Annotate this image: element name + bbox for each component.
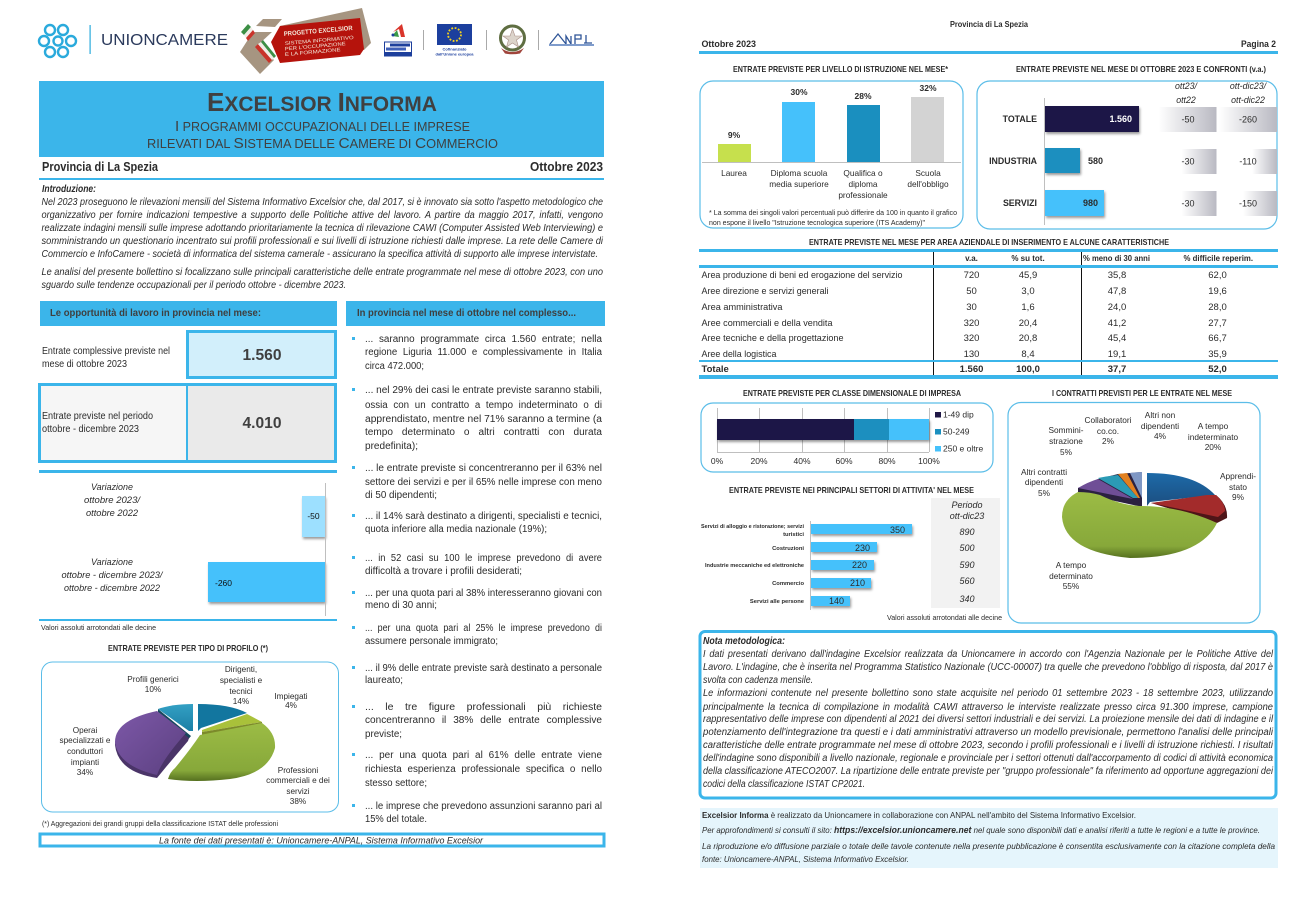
heading: opportunità: Le opportunità di lavoro in provincia nel mese:	[50, 307, 261, 319]
pie: profili	[115, 704, 275, 781]
table: area aziendale: Aree della logistica	[702, 349, 777, 360]
table: area aziendale: 20,4	[1019, 318, 1037, 329]
bullet list: ... le imprese che prevedono assunzioni saranno pari al	[365, 801, 602, 812]
heading: opportunità	[40, 301, 337, 326]
table: area aziendale: 24,0	[1108, 302, 1126, 313]
table: area aziendale: % meno di 30 anni	[1083, 254, 1150, 263]
bullet list: settore dei servizi e per il 65% nelle imprese con meno	[365, 477, 603, 488]
panel: colophon: La riproduzione e/o diffusione parziale o totale delle tavole contenute nella presente pubblicazione è consentita esclusivamente con la citazione completa della	[702, 842, 1275, 851]
bullet list: ... per una quota pari al 38% interesseranno giovani con	[365, 588, 602, 599]
table: area aziendale: % difficile reperim.	[1184, 254, 1253, 263]
table: area aziendale: Aree commerciali e della vendita	[702, 318, 833, 329]
bullet list: ... saranno programmate circa 1.560 entrate; nella	[365, 334, 603, 345]
chart: contratti: A tempo	[1198, 421, 1229, 431]
chart: entrate e confronti: ott22	[1176, 95, 1196, 105]
chart: livello di istruzione: Scuola	[915, 168, 941, 178]
panel: opportunità di lavoro	[40, 301, 337, 462]
chart: contratti: 9%	[1232, 492, 1245, 502]
chart: livello di istruzione: 32%	[919, 83, 937, 93]
text block: introduzione: Commercio e InfoCamere - società di informatica del sistema camerale - assicurano la specifica attività di supporto alle imprese intervistate.	[42, 249, 598, 260]
chart: settori di attività: 210	[850, 578, 865, 588]
chart: livello di istruzione: professionale	[838, 190, 888, 200]
chart: settori di attività: 230	[855, 543, 870, 553]
table: area aziendale: 50	[966, 286, 977, 297]
source box: La fonte dei dati presentati è: Unioncamere-ANPAL, Sistema Informativo Excelsior	[159, 836, 484, 846]
chart: entrate e confronti: -50	[1181, 114, 1195, 124]
bullet list: ... in 52 casi su 100 le imprese prevedono di avere	[365, 553, 603, 564]
bullet list: ... il 9% delle entrate previste sarà destinato a personale	[365, 663, 603, 674]
chart: settori di attività: 560	[959, 576, 975, 586]
table: area aziendale: 41,2	[1108, 318, 1126, 329]
chart: entrate e confronti: INDUSTRIA	[989, 156, 1038, 166]
chart: livello di istruzione: diploma	[848, 179, 878, 189]
chart: settori di attività: 140	[829, 596, 844, 606]
bullet list: laureato;	[365, 675, 403, 686]
pie: contratti	[1062, 472, 1227, 558]
bullet list: regione Liguria 11.000 e complessivamente in Italia	[365, 347, 603, 358]
chart: contratti: Apprendi-	[1220, 471, 1256, 481]
chart: classe dimensionale	[701, 388, 993, 472]
title: EXCELSIOR INFORMA	[207, 87, 437, 117]
table: area aziendale: 37,7	[1108, 364, 1126, 375]
logo: Progetto Excelsior: PER L'OCCUPAZIONE	[285, 41, 347, 52]
chart: contratti: I CONTRATTI PREVISTI PER LE ENTRATE NEL MESE	[1052, 388, 1232, 398]
chart: entrate per tipo di profilo: specializzati e	[60, 736, 111, 745]
chart: contratti: indeterminato	[1188, 432, 1239, 442]
table: area aziendale: 35,8	[1108, 270, 1126, 281]
stat: entrate del mese: mese di ottobre 2023	[42, 359, 127, 370]
table: area aziendale: Aree tecniche e della progettazione	[702, 333, 844, 344]
chart: entrate e confronti: -30	[1181, 198, 1195, 208]
bullet list: difficoltà a trovare i profili desiderati;	[365, 566, 522, 577]
province and date row: Ottobre 2023	[530, 159, 603, 174]
chart: settori di attività: turistici	[783, 532, 804, 538]
table: area aziendale: ENTRATE PREVISTE NEL MESE PER AREA AZIENDALE DI INSERIMENTO E ALCUNE CARATTERISTICHE	[809, 237, 1169, 247]
table: area aziendale: 52,0	[1208, 364, 1227, 375]
table: area aziendale: v.a.	[965, 254, 978, 263]
chart: variazioni: -260	[215, 578, 232, 588]
panel: colophon: Excelsior Informa è realizzato da Unioncamere in collaborazione con ANPAL nell'ambito del Sistema Informativo Excelsior.	[702, 811, 1136, 820]
chart: contratti: determinato	[1049, 571, 1093, 581]
heading: in provincia	[346, 301, 605, 326]
chart: classe dimensionale: 60%	[835, 456, 853, 466]
table: area aziendale: 30	[966, 302, 977, 313]
table: area aziendale: 19,1	[1108, 349, 1126, 360]
chart: entrate per tipo di profilo: conduttori	[67, 747, 103, 756]
chart: contratti: 20%	[1205, 442, 1222, 452]
chart: settori di attività: Valori assoluti arrotondati alle decine	[887, 613, 1002, 622]
stat: entrate del trimestre: Entrate previste nel periodo	[42, 411, 153, 422]
table: area aziendale: 19,6	[1208, 286, 1227, 297]
page 2 header: Pagina 2	[1241, 39, 1276, 50]
logo: Unioncamere	[39, 25, 228, 57]
bullet list: ... per una quota pari al 61% delle entrate viene	[365, 750, 603, 761]
chart: contratti: 55%	[1063, 581, 1080, 591]
chart: livello di istruzione: * La somma dei singoli valori percentuali può differire da 100 in quanto il grafico	[709, 208, 957, 217]
logo: Progetto Excelsior: E LA FORMAZIONE	[285, 47, 342, 58]
chart: entrate per tipo di profilo: specialisti e	[220, 676, 263, 685]
chart: entrate per tipo di profilo: Dirigenti,	[225, 665, 257, 674]
bullet list: richiesta esperienza professionale specifica o nello	[365, 764, 603, 775]
text block: introduzione: realizzate indagini mensili sulle imprese adottando prioritariamente la tecnica di rilevazione CAWI (Computer Assisted Web Interviewing) e	[42, 223, 603, 234]
bullet list: ... il 14% sarà destinato a dirigenti, specialisti e tecnici,	[365, 511, 602, 522]
chart: entrate e confronti: -150	[1239, 198, 1257, 208]
chart: settori di attività: Servizi alle persone	[750, 599, 805, 605]
chart: settori di attività: ott-dic23	[950, 511, 984, 521]
chart: entrate e confronti: -260	[1239, 114, 1257, 124]
province and date row	[39, 159, 604, 180]
chart: settori di attività: Industrie meccaniche ed elettroniche	[705, 563, 805, 569]
chart: livello di istruzione: Diploma scuola	[771, 168, 828, 178]
bullet list: ... per una quota pari al 25% le imprese prevedono di	[365, 623, 602, 634]
chart: contratti: dipendenti	[1025, 477, 1063, 487]
province and date row: Provincia di La Spezia	[42, 159, 159, 174]
table: area aziendale: 66,7	[1208, 333, 1227, 344]
bullet list: di 50 dipendenti;	[365, 490, 437, 501]
chart: entrate per tipo di profilo: Professioni	[278, 766, 318, 775]
chart: livello di istruzione: ENTRATE PREVISTE PER LIVELLO DI ISTRUZIONE NEL MESE*	[733, 64, 949, 74]
page 2 header	[699, 20, 1278, 54]
chart: entrate per tipo di profilo: 14%	[233, 697, 249, 706]
logo: partner institutions	[384, 24, 594, 56]
chart: variazioni: Variazione	[91, 557, 133, 568]
panel: nota metodologica: Nota metodologica:	[703, 636, 785, 647]
chart: classe dimensionale: 100%	[918, 456, 940, 466]
panel: nota metodologica: potenziamento dell'integrazione tra questi e i dati amministrativi attraverso un modello previsionale, permettono l'analisi delle principali	[702, 727, 1274, 738]
chart: settori di attività: 340	[959, 594, 975, 604]
chart: contratti: stato	[1229, 482, 1247, 492]
table: area aziendale: Area produzione di beni ed erogazione del servizio	[702, 270, 902, 281]
chart: entrate e confronti	[977, 64, 1277, 229]
panel: nota metodologica: caratteristiche delle entrate programmate nel mese di ottobre 2023, secondo i profili professionali e i livelli di istruzione richiesti. I risultati	[703, 740, 1274, 751]
chart: contratti: 5%	[1038, 488, 1051, 498]
stat: entrate del mese: 1.560	[242, 347, 282, 364]
page 2 header: Ottobre 2023	[702, 39, 756, 50]
chart: settori di attività: Commercio	[772, 581, 804, 587]
text block: introduzione: somministrando un questionario incentrato sui profili professionali e sui livelli di istruzione richiesti dalle imprese. La rete delle Camere di	[42, 236, 604, 247]
chart: entrate per tipo di profilo: servizi	[286, 787, 310, 796]
chart: entrate per tipo di profilo	[42, 643, 338, 828]
chart: entrate e confronti: ott-dic23/	[1230, 81, 1268, 91]
chart: entrate e confronti: TOTALE	[1003, 114, 1037, 124]
logo: Progetto Excelsior: SISTEMA INFORMATIVO	[285, 35, 354, 47]
chart: entrate per tipo di profilo: ENTRATE PREVISTE PER TIPO DI PROFILO (*)	[108, 643, 268, 653]
chart: classe dimensionale: 0%	[711, 456, 724, 466]
chart: livello di istruzione: 30%	[790, 87, 808, 97]
panel: in provincia nel mese	[346, 301, 605, 825]
chart: livello di istruzione: Laurea	[721, 168, 747, 178]
chart: livello di istruzione	[700, 64, 963, 228]
bullet list: tempo determinato o altri contratti con durata	[365, 427, 603, 438]
text block: introduzione: Introduzione:	[42, 184, 96, 195]
text block: introduzione: Le analisi del presente bollettino si focalizzano sulle principali caratteristiche delle entrate programmate nel mese di ottobre 2023, con uno	[42, 267, 603, 278]
chart: entrate per tipo di profilo: Profili generici	[127, 675, 179, 684]
stat: entrate del trimestre: 4.010	[242, 415, 282, 432]
chart: settori di attività: Servizi di alloggio e ristorazione; servizi	[701, 524, 804, 530]
chart: contratti: co.co.	[1097, 426, 1119, 436]
chart: contratti: Altri contratti	[1021, 467, 1067, 477]
header banner	[39, 81, 604, 157]
panel: colophon: Per approfondimenti si consulti il sito: https://excelsior.unioncamere.net nel quale sono disponibili dati e analisi riferiti a tutte le regioni e a tutte le province.	[702, 825, 1260, 835]
chart: entrate per tipo di profilo: commerciali e dei	[266, 776, 330, 785]
text block: introduzione: organizzativo per fornire indicazioni tempestive a supporto delle Politiche attive del lavoro. A partire da maggio 2017, infatti, vengono	[42, 210, 603, 221]
logo: Unioncamere: UNIONCAMERE	[101, 32, 228, 49]
chart: contratti: A tempo	[1056, 560, 1087, 570]
chart: variazioni: ottobre - dicembre 2023/	[62, 570, 164, 581]
chart: settori di attività: Costruzioni	[772, 546, 804, 552]
table: area aziendale: 45,4	[1108, 333, 1126, 344]
chart: classe dimensionale: 50-249	[943, 426, 970, 436]
chart: classe dimensionale: ENTRATE PREVISTE PER CLASSE DIMENSIONALE DI IMPRESA	[743, 388, 961, 398]
chart: entrate per tipo di profilo: 10%	[145, 685, 161, 694]
panel: nota metodologica: svolta con cadenza mensile.	[703, 675, 813, 686]
page 2 header: Provincia di La Spezia	[950, 20, 1028, 29]
chart: entrate per tipo di profilo: 34%	[77, 768, 93, 777]
chart: settori di attività: ENTRATE PREVISTE NEI PRINCIPALI SETTORI DI ATTIVITA' NEL MESE	[729, 485, 974, 495]
chart: classe dimensionale: 80%	[878, 456, 896, 466]
chart: classe dimensionale: 250 e oltre	[943, 444, 983, 454]
table: area aziendale: 35,9	[1208, 349, 1227, 360]
table: area aziendale: 28,0	[1208, 302, 1227, 313]
chart: variazioni: -50	[307, 511, 320, 521]
bullet list: quota inferiore alla media nazionale (19%);	[365, 524, 547, 535]
stat: entrate del mese	[42, 332, 336, 378]
chart: entrate per tipo di profilo: Operai	[73, 726, 97, 735]
chart: settori di attività: 590	[959, 560, 975, 570]
table: area aziendale: % su tot.	[1011, 254, 1045, 263]
chart: livello di istruzione: non espone il livello "Istruzione tecnologica superiore (ITS Academy)"	[709, 218, 925, 227]
chart: contratti: 4%	[1154, 431, 1167, 441]
chart: settori di attività: 350	[890, 525, 905, 535]
chart: livello di istruzione: media superiore	[769, 179, 829, 189]
chart: livello di istruzione: dell'obbligo	[907, 179, 949, 189]
chart: entrate e confronti: ott23/	[1175, 81, 1199, 91]
chart: settori di attività: 500	[959, 543, 975, 553]
chart: entrate e confronti: 580	[1088, 156, 1103, 166]
bullet list: 15% del totale.	[365, 814, 427, 825]
chart: entrate e confronti: -110	[1239, 156, 1257, 166]
chart: entrate e confronti: ott-dic22	[1231, 95, 1265, 105]
table: area aziendale: 320	[964, 333, 979, 344]
chart: settori di attività: 220	[852, 560, 867, 570]
logo: partner institutions: Cofinanziato	[442, 46, 467, 52]
subtitle line 2: RILEVATI DAL SISTEMA DELLE CAMERE DI COMMERCIO	[147, 135, 498, 152]
table: area aziendale: 8,4	[1021, 349, 1035, 360]
table: area aziendale: 100,0	[1016, 364, 1040, 375]
table: area aziendale: 1.560	[960, 364, 983, 375]
chart: entrate per tipo di profilo: Impiegati	[274, 692, 308, 701]
table: area aziendale: 1,6	[1021, 302, 1035, 313]
bullet list: ... le entrate previste si concentreranno per il 63% nel	[365, 463, 602, 474]
table: area aziendale: 62,0	[1208, 270, 1227, 281]
stat: entrate del trimestre: ottobre - dicembre 2023	[42, 424, 139, 435]
chart: entrate per tipo di profilo: impianti	[71, 758, 99, 767]
chart: settori di attività: Periodo	[951, 500, 983, 510]
source box	[40, 834, 604, 846]
stat: entrate del trimestre	[40, 384, 336, 462]
chart: entrate e confronti: ENTRATE PREVISTE NEL MESE DI OTTOBRE 2023 E CONFRONTI (v.a.)	[1016, 64, 1266, 74]
chart: contratti: dipendenti	[1141, 421, 1179, 431]
table: area aziendale: Totale	[702, 364, 729, 375]
bullet list: ... le tre figure professionali più richieste	[365, 702, 603, 713]
table: area aziendale: 27,7	[1208, 318, 1227, 329]
logo: Progetto Excelsior	[240, 8, 371, 74]
table: area aziendale: Aree direzione e servizi generali	[702, 286, 828, 297]
panel: nota metodologica	[700, 632, 1276, 798]
chart: entrate e confronti: 980	[1083, 198, 1098, 208]
bullet list: ossia con un contratto a tempo indeterminato o di	[365, 400, 602, 411]
chart: livello di istruzione: Qualifica o	[843, 168, 883, 178]
subtitle line 1: I PROGRAMMI OCCUPAZIONALI DELLE IMPRESE	[175, 118, 470, 135]
heading: in provincia: In provincia nel mese di ottobre nel complesso...	[357, 307, 576, 319]
bullet list: assumere personale immigrato;	[365, 636, 498, 647]
table: area aziendale	[699, 237, 1278, 379]
bullet list: stesso settore;	[365, 778, 427, 789]
chart: variazioni: ottobre - dicembre 2022	[64, 583, 161, 594]
chart: classe dimensionale: 1-49 dip	[943, 410, 974, 420]
chart: contratti: strazione	[1049, 436, 1083, 446]
text block: introduzione: sguardo sulle tendenze occupazionali per il periodo ottobre - dicembre 2023.	[42, 280, 346, 291]
panel: colophon: fonte: Unioncamere-ANPAL, Sistema Informativo Excelsior.	[702, 855, 909, 864]
chart: contratti	[1008, 388, 1260, 623]
bullet list: apprendistato, mentre nel 71% saranno a termine (a	[365, 414, 603, 425]
chart: variazioni: ottobre 2022	[86, 508, 139, 519]
table: area aziendale: 47,8	[1108, 286, 1126, 297]
table: area aziendale: 720	[964, 270, 979, 281]
table: area aziendale: Area amministrativa	[702, 302, 783, 313]
chart: contratti: 5%	[1060, 447, 1073, 457]
table: area aziendale: 45,9	[1019, 270, 1037, 281]
logo: partner institutions: dall'Unione europea	[436, 52, 474, 56]
chart: settori di attività: 890	[959, 527, 975, 537]
chart: entrate e confronti: -30	[1181, 156, 1195, 166]
chart: livello di istruzione: 28%	[854, 91, 872, 101]
chart: entrate e confronti: SERVIZI	[1003, 198, 1037, 208]
chart: settori di attività	[701, 485, 1002, 622]
chart: contratti: Collaboratori	[1084, 415, 1132, 425]
panel: nota metodologica: codici della classificazione ISTAT CP2021.	[703, 779, 865, 790]
bullet list: circa 472.000;	[365, 361, 424, 372]
bullet list: meno di 30 anni;	[365, 600, 437, 611]
chart: classe dimensionale: 20%	[750, 456, 768, 466]
chart: variazioni: ottobre 2023/	[84, 495, 141, 506]
table: area aziendale: 320	[964, 318, 979, 329]
table: area aziendale: 130	[964, 349, 979, 360]
chart: entrate per tipo di profilo: tecnici	[229, 687, 253, 696]
chart: classe dimensionale: 40%	[793, 456, 811, 466]
chart: entrate per tipo di profilo: 38%	[290, 797, 306, 806]
stat: entrate del mese: Entrate complessive previste nel	[42, 346, 170, 357]
chart: entrate e confronti: 1.560	[1109, 114, 1132, 124]
table: area aziendale: 3,0	[1021, 286, 1035, 297]
chart: contratti: Sommini-	[1048, 425, 1084, 435]
panel: colophon	[700, 808, 1278, 868]
chart: livello di istruzione: 9%	[728, 130, 741, 140]
bullet list: concentreranno il 38% delle entrate complessive	[365, 715, 603, 726]
bullet list: predefinita);	[365, 441, 418, 452]
chart: variazioni	[39, 470, 337, 632]
bullet list: previste;	[365, 729, 402, 740]
chart: contratti: Altri non	[1145, 410, 1176, 420]
chart: entrate per tipo di profilo: 4%	[285, 701, 297, 710]
text block: introduzione	[42, 184, 604, 291]
icon: Unioncamere swirl	[39, 25, 76, 57]
table: area aziendale: 20,8	[1019, 333, 1037, 344]
bullet list	[352, 334, 603, 825]
chart: entrate per tipo di profilo: (*) Aggregazioni dei grandi gruppi della classificazione ISTAT delle professioni	[42, 819, 278, 828]
logo: Progetto Excelsior: PROGETTO EXCELSIOR	[284, 25, 353, 38]
chart: variazioni: Variazione	[91, 482, 133, 493]
panel: nota metodologica: principalmente la tecnica di compilazione in modalità CAWI attraverso le interviste realizzate presso circa 91.300 imprese, campione	[702, 702, 1273, 713]
text block: introduzione: Nel 2023 proseguono le rilevazioni mensili del Sistema Informativo Excelsior che, dal 2017, si è innovato sia sotto l'aspetto metodologico che	[42, 197, 603, 208]
chart: contratti: 2%	[1102, 436, 1115, 446]
bullet list: ... nel 29% dei casi le entrate previste saranno stabili,	[365, 385, 602, 396]
chart: variazioni: Valori assoluti arrotondati alle decine	[41, 623, 156, 632]
